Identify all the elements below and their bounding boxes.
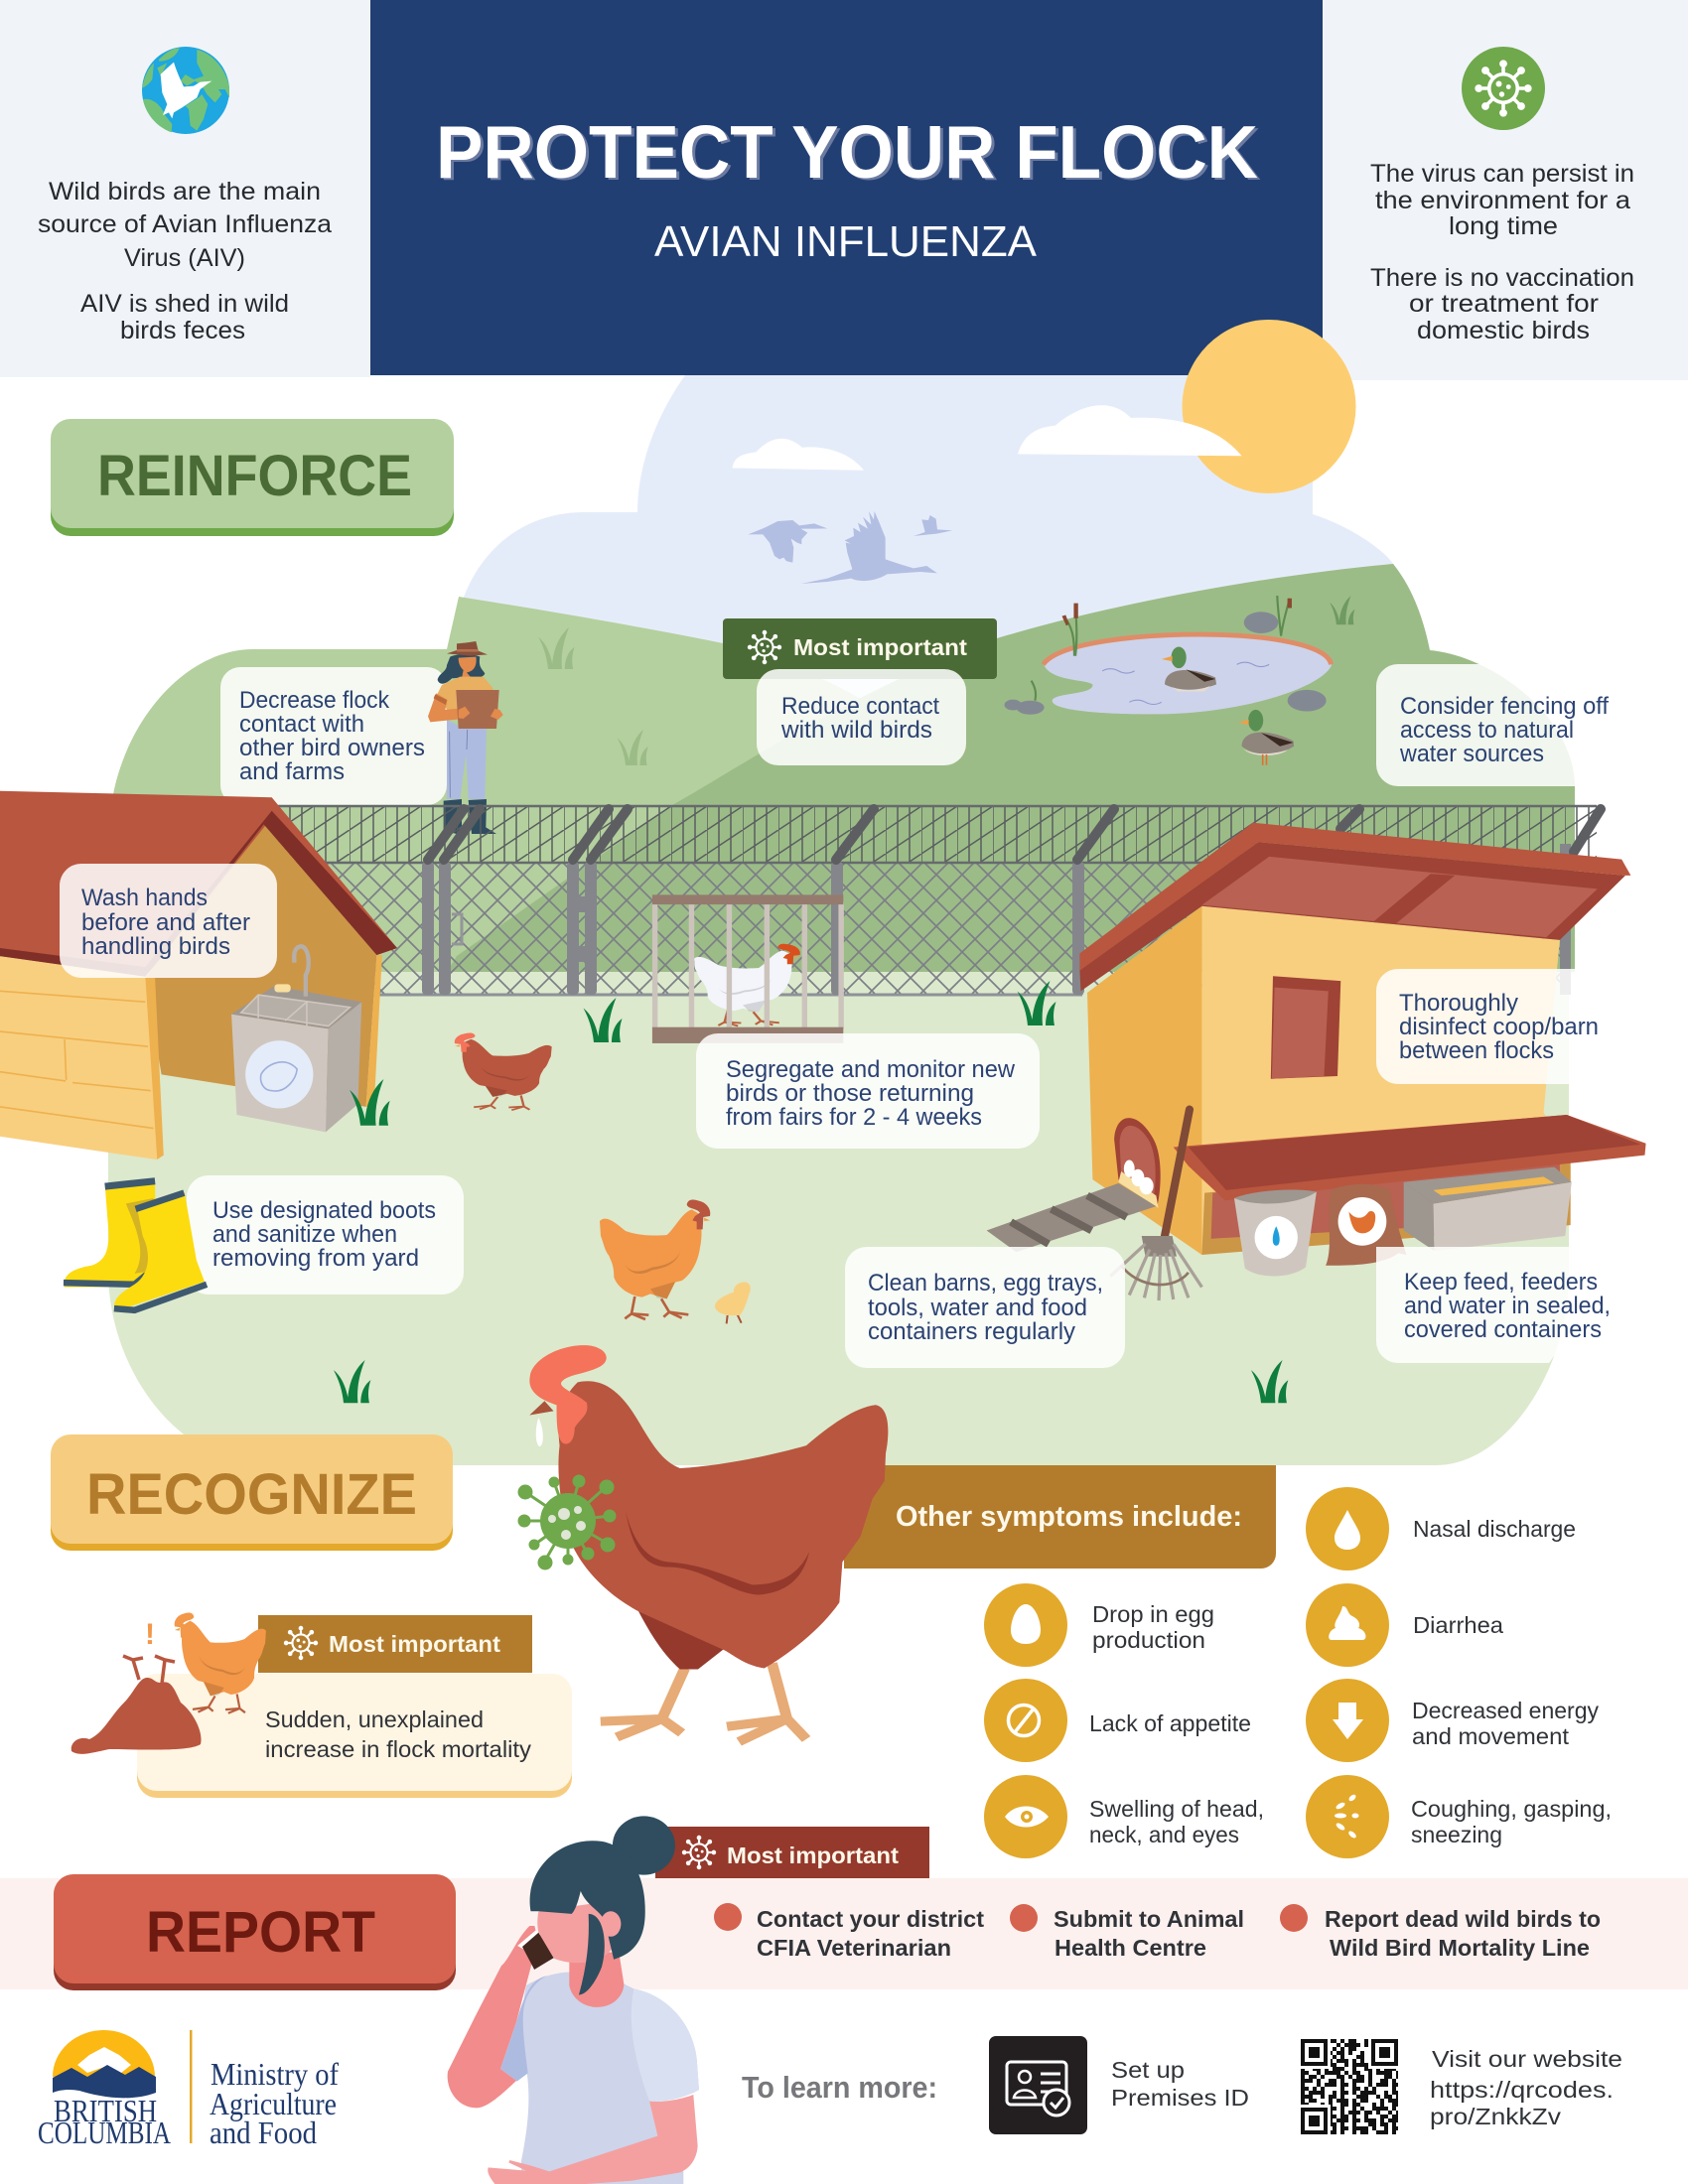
website text [1430,2046,1622,2129]
report item: animal health: Submit to Animal [1054,1906,1244,1932]
callout: reduce contact: Reduce contact [781,693,939,720]
symptom: decreased energy: and movement [1412,1723,1570,1749]
text: virus: or treatment for [1409,290,1599,318]
text: virus: The virus can persist in [1370,160,1634,188]
callout: boots: Use designated boots [212,1197,436,1224]
sick orange hen [145,1613,266,1713]
callout: keep feed: covered containers [1404,1316,1602,1343]
report item: wild bird line: Wild Bird Mortality Line [1330,1935,1590,1961]
text: wild birds: Virus (AIV) [124,244,245,272]
sun [1182,320,1356,493]
ground [108,972,1569,1465]
cage with white hen [652,894,844,1043]
callout: sudden mortality: Sudden, unexplained [265,1706,484,1732]
hand wash sink [231,946,361,1132]
sky [461,375,1430,794]
heading: report: REPORT [146,1900,375,1965]
callout: reduce contact badge [723,618,997,679]
coop window [1271,976,1340,1079]
callout: decrease flock contact [220,667,447,805]
title banner: PROTECT YOUR FLOCK [436,110,1258,194]
woman head and phone [517,1816,675,1994]
title banner [370,0,1323,375]
red hen in yard [455,1033,552,1110]
badge: most important recognize [258,1615,532,1673]
report item: CFIA: CFIA Veterinarian [757,1935,951,1961]
text: virus: long time [1449,212,1558,240]
icon: virus [1462,47,1545,130]
badge: most important report: Most important [727,1843,899,1868]
heading: reinforce: REINFORCE [97,444,412,508]
feeder tray [1404,1167,1572,1251]
callout: keep feed [1376,1247,1611,1363]
light green hill [113,597,874,993]
callout: clean barns: Clean barns, egg trays, [868,1270,1103,1297]
badge: most important recognize: Most important [329,1631,500,1657]
symptom: nasal discharge [1306,1487,1576,1570]
text: virus: domestic birds [1417,317,1590,344]
symptom: swelling: Swelling of head, [1089,1796,1264,1822]
text: wild birds: birds feces [120,317,245,344]
sick orange hen: ! [145,1618,155,1651]
website text: Visit our website [1432,2046,1622,2072]
callout: fencing water: access to natural [1400,717,1574,744]
dead hen [71,1656,202,1754]
website text: pro/ZnkkZv [1430,2104,1562,2129]
callout: segregate: Segregate and monitor new [726,1056,1016,1083]
callout: boots: and sanitize when [212,1221,397,1248]
symptom: lack of appetite: Lack of appetite [1089,1710,1251,1736]
symptom: swelling [984,1775,1264,1858]
foreground grass tufts [334,981,1288,1403]
title banner: PROTECT YOUR FLOCK [439,112,1261,196]
dark green hill [447,564,1575,972]
callout: reduce contact [757,669,966,765]
callout: decrease flock contact: Decrease flock [239,687,390,714]
virus illustration [519,1476,615,1569]
report item: CFIA: Contact your district [757,1906,984,1932]
callout: disinfect: Thoroughly [1399,990,1518,1017]
callout: keep feed: Keep feed, feeders [1404,1269,1598,1296]
badge: most important report [655,1827,929,1878]
callout: clean barns: containers regularly [868,1318,1075,1345]
symptom: decreased energy [1306,1679,1599,1762]
BC government logo: Agriculture [210,2086,337,2121]
other symptoms banner [844,1465,1276,1569]
title banner: AVIAN INFLUENZA [654,217,1038,266]
callout: clean barns [845,1247,1125,1368]
callout: keep feed: and water in sealed, [1404,1293,1611,1319]
callout: wash hands: before and after [81,909,250,936]
pond with ducks and reeds [1005,596,1354,765]
callout: clean barns: tools, water and food [868,1295,1087,1321]
coop lower wall and awning [1174,1115,1646,1255]
symptom: coughing: sneezing [1411,1822,1502,1847]
heading: recognize [51,1434,453,1551]
coop walls [1087,906,1571,1255]
report item: animal health: Health Centre [1055,1935,1206,1961]
callout: sudden mortality: increase in flock mortality [265,1736,532,1762]
premises id: Premises ID [1111,2085,1249,2111]
coop door with eggs [1114,1118,1161,1208]
symptom: diarrhea: Diarrhea [1413,1612,1503,1638]
symptom: swelling: neck, and eyes [1089,1822,1239,1847]
BC government logo: Ministry of [211,2056,339,2092]
text: virus: There is no vaccination [1370,264,1634,292]
callout: boots: removing from yard [212,1245,419,1272]
symptom: egg production [984,1583,1214,1667]
callout: fencing water: water sources [1399,741,1544,767]
premises id: Set up [1111,2057,1185,2083]
callout: disinfect: disinfect coop/barn [1399,1014,1599,1040]
other symptoms banner: Other symptoms include: [896,1501,1242,1533]
callout: wash hands [60,864,277,978]
callout: decrease flock contact: other bird owners [239,735,425,761]
farmer woman [428,641,503,834]
callout: disinfect: between flocks [1399,1037,1554,1064]
icon: premises card [989,2036,1087,2134]
BC government logo [38,2030,339,2150]
report band [0,1878,1688,1989]
chain link fence [278,806,1601,995]
left coop [0,791,397,1160]
symptom: egg production: Drop in egg [1092,1601,1214,1627]
panel: virus persistence fact [1323,0,1688,380]
water bucket [1234,1189,1317,1276]
symptom: coughing [1306,1775,1612,1858]
report item: wild bird line: Report dead wild birds to [1325,1906,1601,1932]
callout: boots [187,1175,464,1295]
callout: wash hands: handling birds [81,933,230,960]
rubber boots [64,1181,207,1311]
text: wild birds: Wild birds are the main [49,178,321,205]
woman body [448,1926,699,2184]
callout: reduce contact: with wild birds [780,717,932,744]
to learn more: To learn more: [742,2070,937,2105]
icon: globe with bird [142,47,229,134]
premises id [989,2036,1249,2134]
BC government logo: BRITISH [54,2093,157,2128]
symptom: nasal discharge: Nasal discharge [1413,1516,1576,1542]
callout: fencing water [1376,664,1609,786]
symptom: coughing: Coughing, gasping, [1411,1796,1612,1822]
callout: decrease flock contact: and farms [239,758,345,785]
callout: fencing water: Consider fencing off [1400,693,1609,720]
callout: reduce contact badge: Most important [793,634,967,660]
BC government logo: COLUMBIA [38,2115,171,2150]
rake [1110,1110,1201,1300]
callout: sudden mortality [137,1674,572,1798]
flying wild birds [748,511,952,584]
panel: wild birds fact [0,0,370,377]
large sick hen [529,1345,888,1741]
symptom: decreased energy: Decreased energy [1412,1698,1599,1723]
callout: segregate: birds or those returning [726,1080,974,1107]
symptom: lack of appetite [984,1679,1251,1762]
QR code [1301,2039,1398,2134]
text: wild birds [38,178,332,344]
woman on phone [448,1816,699,2184]
heading: report [54,1874,456,1990]
callout: disinfect [1376,969,1599,1084]
feed sack [1326,1184,1406,1266]
heading: recognize: RECOGNIZE [86,1462,417,1527]
text: wild birds: AIV is shed in wild [80,290,289,318]
report item: animal health [1010,1904,1244,1961]
coop roof [1079,823,1630,991]
callout: wash hands: Wash hands [81,885,208,911]
report item: wild bird line [1280,1904,1601,1961]
clouds [733,405,1242,471]
coop ramp [987,1183,1156,1252]
website text: https://qrcodes. [1430,2077,1614,2103]
symptom: egg production: production [1092,1627,1205,1653]
callout: segregate: from fairs for 2 - 4 weeks [726,1104,982,1131]
text: wild birds: source of Avian Influenza [38,210,332,238]
heading: reinforce [51,419,454,536]
symptom: diarrhea [1306,1583,1503,1667]
report item: CFIA [714,1903,984,1961]
orange hen and chick in yard [600,1200,751,1323]
text: virus [1370,160,1634,344]
callout: segregate [696,1033,1040,1149]
right coop [987,823,1646,1300]
pale hill grass [538,627,648,765]
text: virus: the environment for a [1375,187,1630,214]
callout: decrease flock contact: contact with [239,711,364,738]
BC government logo: and Food [210,2115,317,2150]
